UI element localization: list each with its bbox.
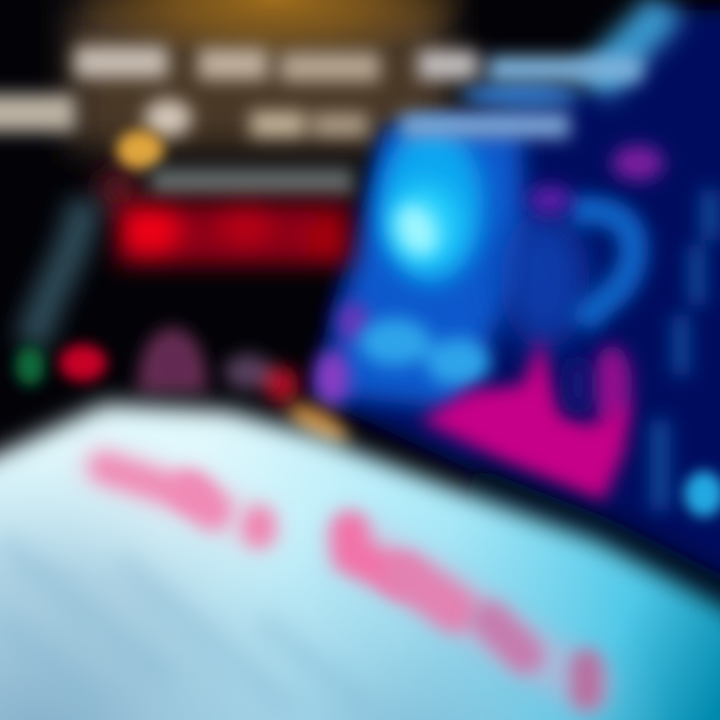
orange edge glow	[282, 395, 354, 453]
poster cyan glow	[380, 127, 484, 283]
sheet lower-centre shade	[120, 500, 680, 720]
poster base	[310, 10, 720, 610]
poster magenta chart	[420, 335, 632, 502]
sheet shadow bands	[0, 540, 370, 710]
pink body strokes	[350, 530, 587, 695]
poster blue curve	[570, 210, 633, 325]
pink body band lower	[490, 620, 525, 655]
top-right light streak	[595, 4, 665, 90]
heading blue underglow	[460, 81, 580, 109]
pink heading blob	[190, 490, 212, 510]
pink heading band	[105, 468, 195, 497]
pink heading strokes	[100, 465, 259, 532]
poster highlight	[387, 197, 447, 263]
pink body band middle	[405, 575, 455, 610]
poster right column lights	[650, 190, 720, 510]
magenta spike right	[592, 345, 632, 425]
poster dark lower band	[470, 485, 720, 615]
poster bright glow	[389, 183, 461, 267]
poster dark notch	[566, 357, 590, 413]
icon: yellow marker	[116, 130, 164, 170]
green accent	[15, 346, 45, 386]
panel: pale sheet	[0, 403, 720, 720]
left teal column	[30, 200, 85, 345]
pink body band start	[350, 530, 400, 578]
red dot	[59, 344, 107, 382]
poster cyan dot	[684, 471, 720, 517]
red banner	[116, 203, 350, 265]
pink heading dot	[243, 522, 275, 532]
poster mid-blue wash	[500, 210, 590, 350]
poster blue glow	[325, 130, 530, 410]
heading line one	[74, 46, 642, 82]
panel: blue poster	[310, 10, 720, 615]
magenta body	[420, 335, 630, 502]
sheet soft edge	[0, 403, 720, 720]
grey sub-heading bar	[150, 168, 354, 196]
pink body halo	[350, 540, 587, 685]
sheet lower-left shade	[0, 440, 360, 720]
dark red under marker	[94, 166, 142, 214]
sheet solid body	[0, 438, 720, 720]
poster light-blue blobs	[359, 318, 490, 386]
top amber glow	[70, 0, 475, 150]
poster purple spots	[528, 145, 664, 215]
grey-red small cluster	[224, 354, 299, 404]
pink heading halo	[100, 465, 258, 528]
poster violet edge	[314, 302, 369, 406]
pink body end	[571, 665, 603, 695]
heading line two	[0, 94, 570, 138]
mauve arch	[145, 335, 200, 385]
